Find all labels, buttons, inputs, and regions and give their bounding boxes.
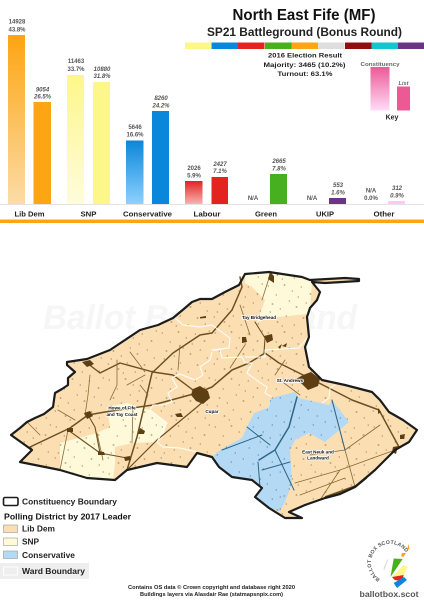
Lib Dem bars: 9054 (36, 88, 50, 94)
party labels: UKIP (316, 212, 334, 218)
SNP polling districts (60, 272, 312, 480)
party labels: Green (255, 212, 277, 218)
UKIP bars: N/A (307, 196, 318, 202)
Lib Dem bars: 43.8% (8, 28, 26, 34)
place labels: Howe of Fife (108, 406, 136, 410)
party labels (14, 212, 395, 218)
2016 election result (264, 52, 346, 78)
Conservative bars: 16.6% (126, 132, 144, 138)
ward boundary key: Ward Boundary (22, 567, 86, 576)
watermark: Ballot Box Scotland (43, 299, 358, 337)
SNP bars: 31.8% (93, 74, 111, 80)
Green bars: N/A (248, 196, 259, 202)
place labels: St. Andrews (277, 378, 304, 383)
UKIP bars: 1.6% (331, 190, 345, 196)
Other bars: 312 (392, 186, 403, 192)
constituency boundary (11, 272, 417, 518)
party labels: SNP (80, 212, 97, 218)
Green bars (248, 159, 287, 204)
party labels: Conservative (123, 212, 172, 218)
2016 election result: Majority: 3465 (10.2%) (264, 62, 346, 69)
Labour bars (185, 162, 228, 204)
SNP bars: 33.7% (67, 67, 85, 73)
UKIP bars (307, 183, 346, 204)
key: Constituency (360, 62, 400, 68)
key (360, 62, 410, 122)
subtitle: SP21 Battleground (Bonus Round) (207, 27, 402, 39)
SNP bars: 10880 (94, 67, 111, 73)
Conservative bars: 8260 (154, 96, 168, 102)
Conservative bars (126, 96, 170, 204)
place labels: and Tay Coast (106, 412, 138, 417)
Conservative key: Conservative (22, 551, 76, 560)
place labels (106, 315, 334, 460)
party colour strip (185, 42, 424, 49)
legend (0, 498, 132, 579)
roads through Conservative area (222, 397, 345, 490)
constituency boundary key: Constituency Boundary (22, 498, 118, 506)
logo: Ballot Box Scotland (360, 540, 419, 599)
key: List (399, 81, 410, 87)
Lib Dem key: Lib Dem (22, 524, 55, 534)
Conservative polling districts (212, 392, 349, 511)
party labels: Lib Dem (14, 212, 44, 218)
bar chart (0, 20, 424, 218)
Other bars: 0.0% (364, 196, 378, 202)
Labour bars: 7.1% (213, 169, 227, 175)
ward boundaries (150, 318, 335, 452)
SNP bars: 11463 (68, 59, 85, 65)
logo ring text: BALLOT BOX SCOTLAND (367, 540, 408, 582)
Other bars: N/A (366, 188, 377, 194)
credits: Buildings layers via Alasdair Rae (statmapsnpix.com) (140, 592, 283, 598)
Lib Dem bars: 14928 (9, 20, 26, 26)
party labels: Labour (194, 212, 221, 218)
Labour bars: 2026 (187, 166, 201, 172)
place labels: East Neuk and (302, 450, 334, 454)
2016 election result: Turnout: 63.1% (278, 71, 332, 78)
UKIP bars: 553 (333, 183, 344, 189)
Other bars: 0.9% (390, 194, 404, 200)
roads (27, 275, 399, 500)
key: Key (386, 114, 399, 122)
Conservative bars: 5646 (128, 125, 142, 131)
place labels: Tay Bridgehead (242, 315, 276, 320)
SNP bars (67, 59, 111, 204)
Conservative bars: 24.2% (151, 104, 170, 110)
Other bars (364, 186, 405, 204)
legend heading: Polling District by 2017 Leader (4, 512, 132, 522)
constituency map (11, 272, 417, 518)
Lib Dem bars: 26.5% (33, 94, 52, 100)
Green bars: 2665 (271, 159, 286, 165)
SNP key: SNP (22, 538, 40, 546)
building clusters (67, 272, 405, 461)
logo wordmark: ballotbox.scot (360, 589, 419, 599)
party labels: Other (374, 212, 395, 218)
orange divider (0, 220, 424, 223)
place labels: Landward (307, 456, 329, 460)
2016 election result: 2016 Election Result (268, 52, 343, 60)
Green bars: 7.8% (272, 166, 286, 172)
credits (128, 584, 295, 598)
Lib Dem polling districts (11, 272, 417, 518)
logo Scotland map (384, 544, 410, 588)
title: North East Fife (MF) (232, 7, 376, 24)
Labour bars: 2427 (212, 162, 227, 168)
credits: Contains OS data © Crown copyright and database right 2020 (128, 584, 295, 591)
place labels: Cupar (205, 409, 219, 414)
Lib Dem bars (8, 20, 52, 204)
Labour bars: 5.9% (187, 174, 201, 180)
scattered buildings (11, 272, 417, 518)
